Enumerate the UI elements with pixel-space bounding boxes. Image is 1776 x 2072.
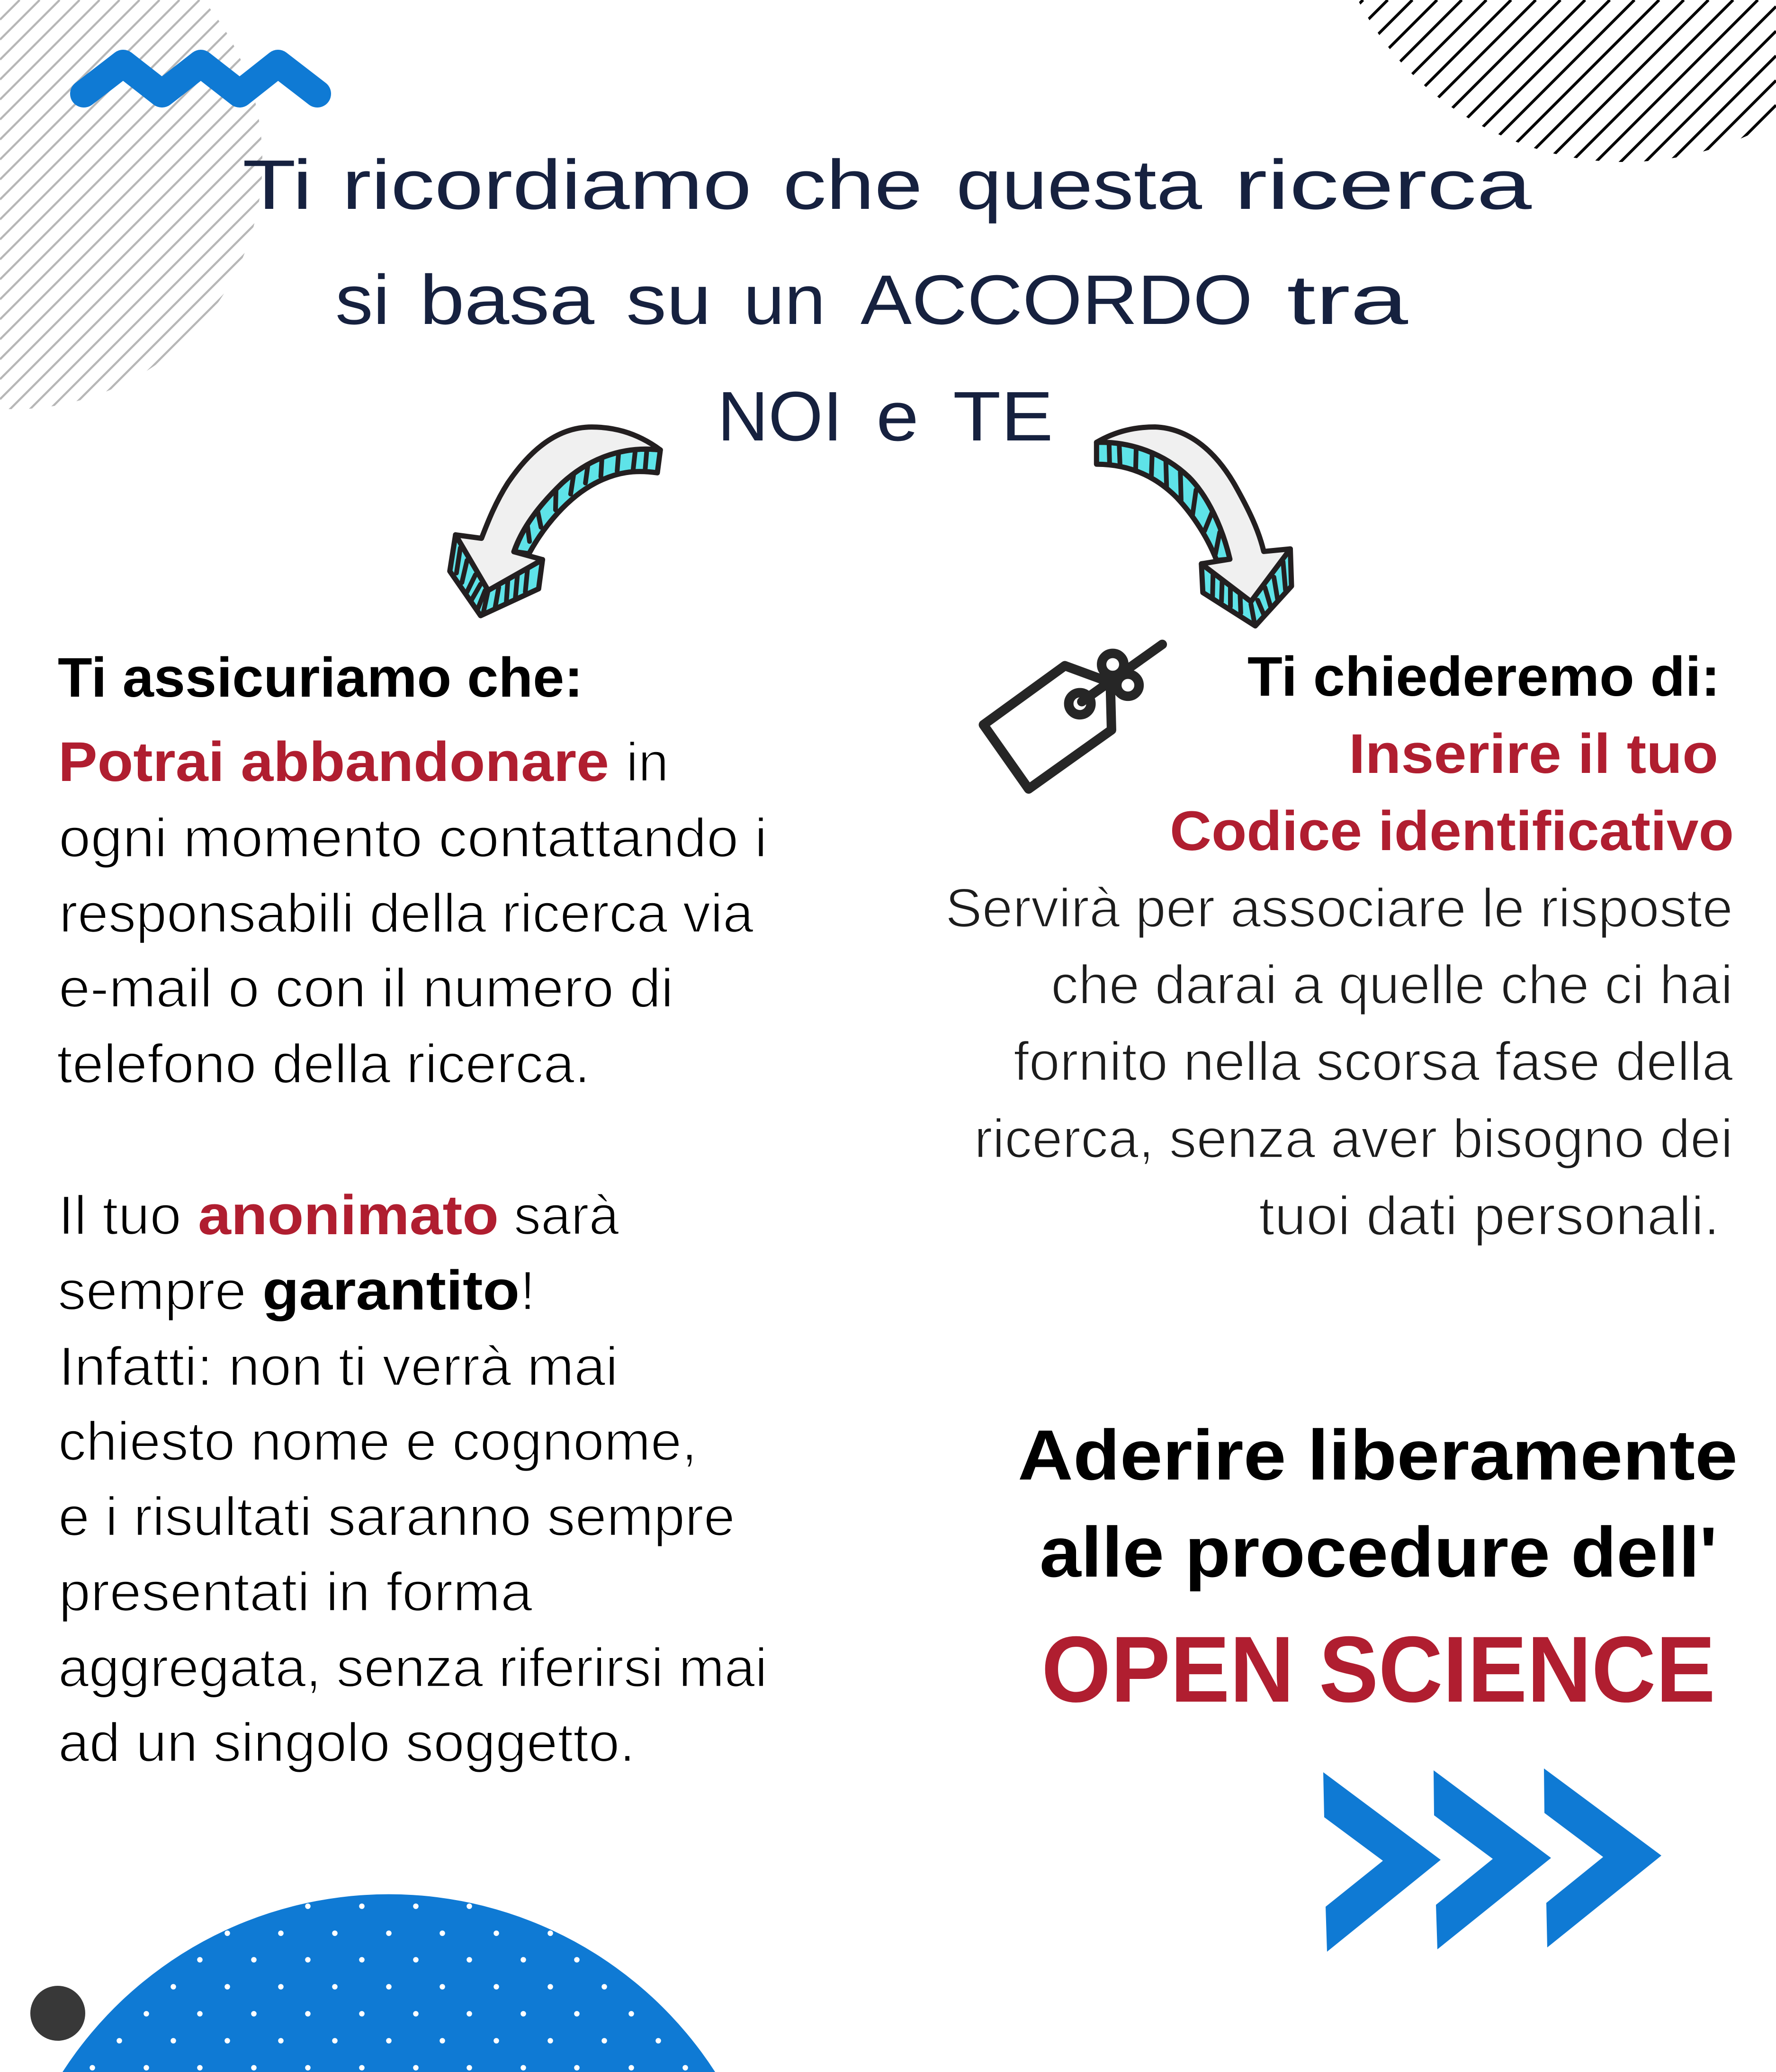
decoration: black striped circle top right (1359, 0, 1776, 162)
title: ricordiamo (342, 146, 752, 224)
panel: right column, requests (945, 646, 1734, 1247)
title: basa (420, 261, 595, 339)
title: ACCORDO (861, 261, 1253, 339)
text block: anonymity: anonimato (198, 1184, 499, 1247)
title: tra (1287, 261, 1408, 339)
text block: identification code: Codice identificativo (1170, 800, 1734, 862)
decoration: blue dotted circle bottom (63, 1894, 715, 2072)
text block: anonymity: sempre (58, 1260, 246, 1321)
text block: withdrawal: telefono della ricerca. (57, 1033, 590, 1094)
text block: identification code (1170, 723, 1734, 862)
callout: open science: Aderire liberamente (1018, 1415, 1738, 1495)
text block: anonymity: chiesto nome e cognome, (58, 1410, 697, 1472)
title: TE (953, 377, 1053, 456)
heading: Ti chiederemo di: Ti chiederemo di: (1247, 646, 1720, 708)
icon: three blue chevrons (1323, 1768, 1661, 1952)
decoration: grey striped circle top left (0, 0, 262, 409)
panel: left column, guarantees (57, 646, 767, 1773)
callout: open science (1018, 1415, 1738, 1722)
arrow: curved right (1096, 427, 1292, 626)
text block: anonymity: presentati in forma (59, 1561, 533, 1623)
title: su (626, 261, 711, 339)
title: un (744, 261, 825, 339)
title: Ti (242, 146, 312, 224)
text block: anonymity: garantito (262, 1259, 520, 1322)
title (242, 146, 1532, 456)
title: questa (956, 146, 1202, 224)
arrow: curved left (450, 427, 660, 616)
text block: explanation: fornito nella scorsa fase della (1014, 1031, 1733, 1092)
text block: explanation: Servirà per associare le risposte (945, 877, 1733, 939)
icon: blue zigzag (84, 63, 317, 94)
text block: withdrawal: in (626, 731, 669, 793)
text block: anonymity: Infatti: non ti verrà mai (59, 1336, 618, 1397)
title: NOI (718, 377, 843, 456)
text block: anonymity: ad un singolo soggetto. (58, 1712, 635, 1773)
text block: anonymity (58, 1184, 767, 1773)
callout: open science: OPEN SCIENCE (1041, 1617, 1715, 1722)
text block: withdrawal (57, 731, 767, 1094)
text block: anonymity: sarà (514, 1184, 619, 1246)
text block: explanation: ricerca, senza aver bisogno dei (974, 1108, 1733, 1169)
text block: anonymity: Il tuo (58, 1184, 181, 1246)
icon: price tag (984, 645, 1162, 789)
text block: identification code: Inserire il tuo (1349, 723, 1718, 785)
text block: anonymity: aggregata, senza riferirsi mai (58, 1637, 767, 1698)
text block: explanation: tuoi dati personali. (1259, 1185, 1720, 1247)
decoration: dark dot (30, 1986, 85, 2041)
text block: explanation (945, 877, 1733, 1247)
text block: withdrawal: responsabili della ricerca via (59, 882, 753, 944)
title: e (876, 377, 919, 456)
callout: open science: alle procedure dell' (1040, 1512, 1717, 1592)
text block: withdrawal: e-mail o con il numero di (59, 957, 673, 1019)
title: che (783, 146, 923, 224)
text block: anonymity: e i risultati saranno sempre (58, 1486, 735, 1547)
title: ricerca (1234, 146, 1532, 224)
text block: withdrawal: ogni momento contattando i (59, 807, 767, 869)
text block: explanation: che darai a quelle che ci hai (1051, 954, 1733, 1015)
title: si (335, 261, 390, 339)
text block: anonymity: ! (520, 1260, 535, 1321)
text block: withdrawal: Potrai abbandonare (58, 731, 609, 793)
heading: Ti assicuriamo che: Ti assicuriamo che: (58, 646, 583, 709)
